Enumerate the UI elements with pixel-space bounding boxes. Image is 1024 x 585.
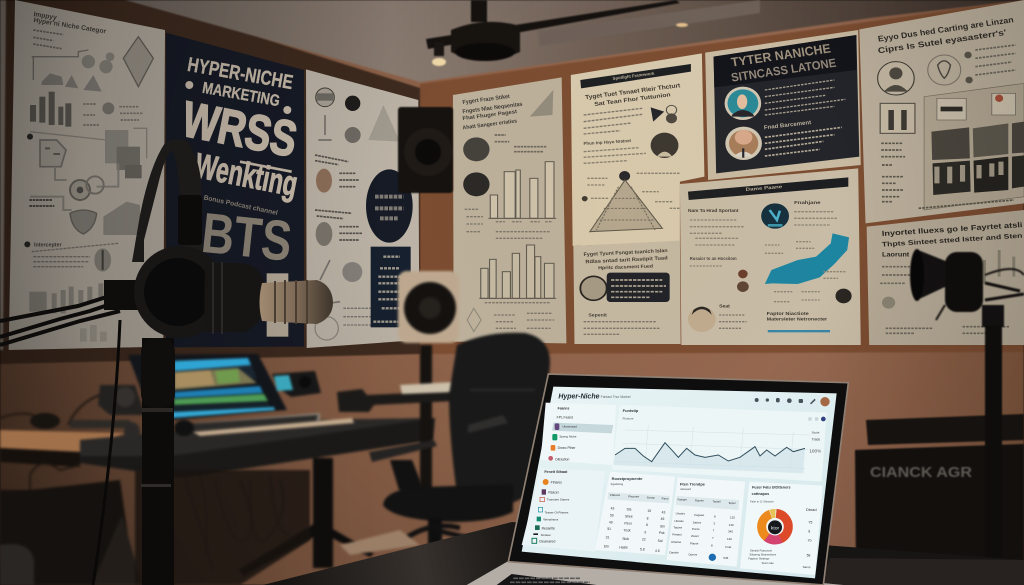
donut chart panel: Sttnaits Foasosunt [750, 549, 772, 553]
ceiling projector and light rail [426, 0, 760, 66]
foreground microphone with headphones [0, 139, 333, 585]
table panel two: Tautse [673, 526, 682, 530]
chart: upper bars [490, 162, 554, 218]
dark circle callout [366, 169, 413, 243]
poster: audience map: Matersieter Netronecter [767, 317, 827, 323]
poster: audience map: Rusaior to an Hocsitom [690, 256, 737, 262]
table panel one: 45 [661, 517, 665, 521]
poster: hyper-niche marketing title: BTS [199, 202, 295, 274]
poster: hyper-niche marketing title: HYPER-NICHE [186, 54, 295, 94]
poster: hyper-niche marketing title: MARKETING [201, 80, 281, 110]
table panel two: Roprter [695, 499, 704, 503]
donut chart panel: Y5 [808, 520, 813, 524]
desk speaker [98, 385, 145, 415]
poster: hyper-niche categories [9, 0, 165, 350]
donut chart panel: Fagteon Stratings [748, 556, 770, 560]
table panel one: Roostpropnente [612, 476, 643, 481]
table panel two: Fagsee [694, 513, 705, 517]
table panel two: Fateger [678, 498, 687, 502]
poster: audience map: Faptor Niactiote [767, 311, 809, 317]
table panel two: Tantatl [713, 500, 721, 504]
table panel two: Uhstiro [676, 511, 685, 515]
table panel two: Plante [690, 542, 699, 546]
poster: dark headline with portraits: SITNCASS LATONE [730, 56, 837, 84]
sidebar: channels: FPL Feand [557, 416, 573, 420]
cables [0, 294, 120, 345]
table panel two: 130 [729, 523, 734, 527]
mouse and headset [30, 413, 60, 429]
right wall posters [453, 0, 1024, 345]
sidebar: resources: Wenalrtoss [543, 518, 559, 522]
table panel one: 43 [611, 506, 615, 510]
table panel one: Tnsk [623, 528, 631, 532]
table panel one: 40 [609, 520, 613, 524]
table panel two: 8 [711, 543, 713, 547]
table panel two: Pvnte [692, 527, 700, 531]
cables [0, 395, 100, 500]
desk legs [313, 458, 333, 568]
laptop screen: Hyper-Niche [558, 393, 600, 400]
line chart panel [612, 405, 827, 482]
tablet [128, 354, 287, 420]
table panel two: 8 [714, 514, 716, 518]
poster: dark headline with portraits: Fnad Barcement [764, 120, 812, 131]
poster: host card: Rdlas sntad tarit Rastipit Tuad [585, 256, 668, 265]
map shape [765, 233, 849, 284]
poster: lower right notes: Laorunt [882, 252, 910, 259]
poster: lower right notes: Thpts Sinteet stted Istter and Sten [882, 233, 1023, 249]
table panel one: Ffatuoo [610, 493, 620, 497]
wooden side desk [0, 430, 125, 452]
poster: pyramid framework: Sat Tean Fhor Tuttunion [594, 92, 671, 108]
desk surface [80, 418, 435, 478]
poster: hyper-niche categories: Intercepter [34, 243, 62, 249]
foreground dark floor and stool [0, 470, 310, 585]
poster: audience map: Seat [719, 304, 730, 309]
line chart panel: Trade [812, 438, 820, 442]
table panel two: Dartsle [669, 551, 679, 555]
poster: pyramid framework: Spotlight Framework [612, 71, 655, 81]
office chair [340, 333, 550, 555]
poster: bar charts: Ahatt Sangeer eriaties [462, 119, 517, 131]
table panel two: Tepter [728, 501, 736, 505]
speaker: black monitor [398, 107, 453, 193]
sidebar: resources: Rsacel [548, 490, 559, 494]
table panel one: Sin [660, 524, 665, 528]
poster: host card [573, 241, 681, 344]
table panel two: 7 [713, 528, 715, 532]
poster: lower right notes: Inyortet Iluexs go Ie Fayrtet atsli [881, 220, 1023, 238]
sidebar: channels: Uhatsnaad [562, 424, 577, 428]
speaker: cream monitor [398, 271, 459, 343]
headphone band [132, 139, 203, 262]
donut [756, 508, 794, 545]
poster: hyper-niche marketing title: Wenkting [192, 146, 301, 204]
table panel two: Uhlelne [671, 540, 681, 544]
table panel two: Uttstas [674, 519, 684, 523]
table panel one: Scrag [647, 495, 655, 499]
table panel two: 3 [713, 522, 715, 526]
poster: pyramid framework: Phun tnp Hsyo Nratnet [583, 138, 632, 146]
poster: bar charts: Fhat Fhuger Pagest [462, 109, 518, 122]
sidebar: channels: Feanns [558, 406, 569, 410]
table panel one: 9 [644, 530, 646, 534]
table panel one: Etn [604, 544, 609, 548]
poster: host card: Hpritc dacsment Fued [598, 264, 653, 271]
sidebar: channels: Dmeo Pther [558, 446, 576, 450]
line chart panel: Flutsure [623, 416, 634, 420]
poster: hyper-niche categories: Hyper'ni Niche Categor [33, 17, 107, 36]
table panel one: Fgatuting [611, 482, 623, 486]
sidebar: resources: Fthares [551, 481, 562, 485]
left desk with tablet and accessories [0, 354, 435, 576]
poster: host card: Sepenit [588, 313, 607, 319]
table panel one: 22 [642, 538, 646, 542]
photo grid [931, 122, 1024, 195]
laptop [467, 374, 848, 585]
table panel two: netsuad [680, 487, 691, 491]
chart: lower bars [481, 245, 554, 298]
poster: bar charts: Fygert Fraze Stiket [462, 94, 510, 106]
table panel two: 7 [712, 536, 714, 540]
table panel one: Dis [627, 508, 632, 512]
table panel one: 8 [646, 523, 648, 527]
donut chart panel: Fabrt in Cr Sthaotes [750, 500, 774, 504]
line chart panel: Stude [812, 430, 820, 434]
poster: host card: Fyget Tyunt Fsngat tuanich Islan [583, 248, 668, 258]
line chart panel: Funtstip [623, 408, 639, 413]
table panel one: 51 [607, 527, 611, 531]
poster: pyramid framework: Tyget Tuet Tsnaet Rieir Thcturt [585, 82, 682, 101]
laptop bezel [508, 374, 848, 585]
sidebar: resources: Teaser Ot Pitanes [545, 510, 569, 514]
table panel two: 345 [728, 530, 733, 534]
icon: bar chart [30, 92, 71, 127]
table panel one: 31 [606, 536, 610, 540]
small display device [272, 371, 321, 397]
left wall posters [9, 0, 419, 350]
table panel two: Fnat [725, 545, 731, 549]
poster: audience map: Nam Ta Hrad Sportant [688, 208, 739, 214]
sidebar: resources: Sintaue [541, 533, 551, 537]
poster: bar charts [453, 77, 566, 343]
line chart panel: 100% [809, 448, 821, 453]
stool [0, 544, 34, 585]
table panel one: Pisonee [628, 494, 639, 498]
donut chart panel: 8 [808, 529, 810, 533]
table panel one [595, 472, 675, 555]
sidebar: channels [541, 403, 616, 465]
donut chart panel: cottnapus [752, 492, 769, 496]
poster: hyper-niche marketing title: WRSS [178, 91, 301, 168]
poster: lower right notes [867, 210, 1024, 345]
glass table [263, 522, 1024, 585]
donut chart panel: Stunt nate [762, 561, 774, 565]
table panel one: Sal [658, 539, 663, 543]
side table and white speaker [337, 271, 459, 495]
poster: dark headline with portraits [705, 30, 861, 180]
table panel one: 43 [662, 510, 666, 514]
poster: audience icons and photo grid: Eyyo Dus hed Carting are Linzan [877, 15, 1014, 44]
donut chart panel: Fuser Fatu UtOtteners [752, 486, 791, 490]
donut chart panel: ktor [771, 525, 779, 531]
table panel one: 4.5 [655, 549, 660, 553]
sidebar: resources: Fenelt Sthaat [544, 470, 568, 474]
poster: hyper-niche marketing title: Bonus Podcast channel [203, 194, 278, 217]
right background microphone [910, 249, 1024, 585]
donut chart panel: 58 [807, 554, 811, 558]
table panel one: 8 [647, 516, 649, 520]
table panel two: 120 [730, 515, 735, 519]
table panel two: 545 [723, 556, 729, 560]
sidebar: resources: Tvanstert Stanes [547, 498, 570, 502]
table panel one: Fano [662, 496, 669, 500]
laptop base and keyboard [467, 560, 843, 585]
sidebar: resources [522, 468, 605, 552]
table panel one: Psk [659, 531, 665, 535]
sidebar: channels: Ditrastion [555, 457, 570, 461]
poster: dark headline with portraits: TYTER NANICHE [730, 41, 832, 69]
right side equipment rack: CIANCK AGR [870, 464, 972, 481]
poster: bar charts: Fngets Nlac Neqsenitas [462, 102, 524, 115]
poster: hyper-niche marketing title [166, 33, 304, 347]
table panel one: Stok [622, 537, 629, 541]
table panel two: Zissnr [691, 534, 699, 538]
toolbar icons [755, 398, 816, 404]
table panel one: Shee [625, 515, 633, 519]
mic stand [93, 320, 175, 585]
laptop screen [522, 387, 837, 578]
ceiling [125, 0, 1024, 82]
poster: pyramid framework [571, 53, 704, 246]
dark callout card [371, 247, 411, 327]
table panel two: Pettast [672, 533, 682, 537]
donut chart panel: Samp [803, 565, 811, 569]
poster: audience map [680, 168, 861, 345]
donut chart panel: Dtnad [806, 507, 817, 512]
sidebar: resources: Deanared [539, 540, 555, 544]
table panel two: Ften Trendpe [680, 482, 706, 487]
table panel two: Opens [688, 552, 698, 556]
table panel one: 5.8 [640, 548, 645, 552]
poster: audience icons and photo grid: Ciprs Is Sutel eyasasterr's' [877, 27, 1007, 55]
poster: audience map: Fnahjane [794, 200, 821, 206]
laptop screen: Fantast Thur Market [601, 395, 631, 399]
sidebar: channels: Speng Niche [559, 435, 577, 439]
poster: audience map: Dame Paane [745, 184, 783, 193]
table panel two: 140 [727, 537, 732, 541]
table panel two [667, 477, 745, 567]
sidebar: resources: Resantte [542, 526, 555, 530]
donut chart panel [740, 482, 823, 575]
table panel two: Sattos [693, 520, 702, 524]
portrait: host two [725, 127, 762, 160]
poster: portraits and callouts [306, 69, 419, 348]
mic body [134, 246, 226, 338]
table panel one: 15 [647, 509, 651, 513]
hanging cables [185, 475, 290, 570]
poster: audience icons and photo grid [859, 0, 1024, 223]
donut chart panel: Stfoaeng Steanestines [749, 552, 777, 556]
keyboard and paper [195, 413, 320, 430]
poster: hyper-niche categories: Imppyy [33, 11, 57, 22]
right side equipment rack [855, 414, 1024, 575]
portrait: host one [725, 87, 761, 120]
table panel one: Hasle [619, 546, 628, 550]
mic grille [260, 280, 333, 324]
table panel one: 50 [610, 514, 614, 518]
table panel one: Psoo [624, 522, 632, 526]
donut chart panel: Yo [808, 539, 812, 543]
